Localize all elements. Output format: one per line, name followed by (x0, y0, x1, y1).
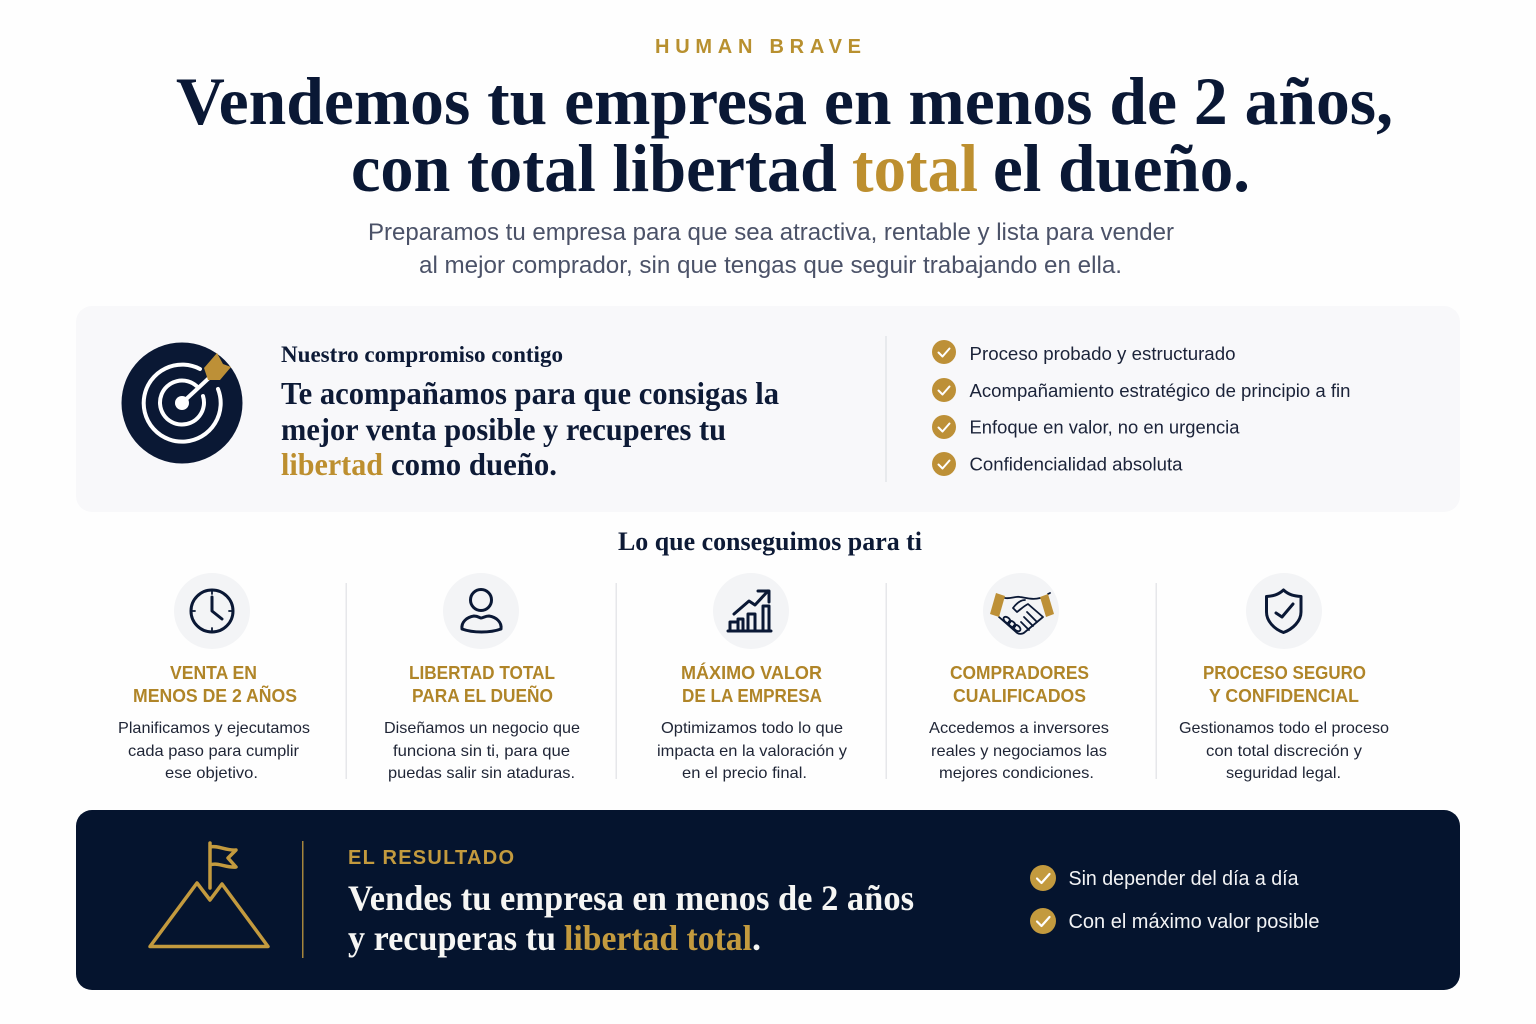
column: libertad total: puedas salir sin ataduras. (388, 765, 575, 782)
title: Vendemos tu empresa en menos de 2 años, (176, 63, 1393, 139)
column: libertad total (384, 573, 580, 782)
column: proceso seguro: PROCESO SEGURO (1203, 663, 1366, 683)
column: máximo valor: MÁXIMO VALOR (681, 662, 822, 683)
column: proceso seguro (1179, 573, 1389, 782)
brand eyebrow: HUMAN BRAVE (655, 36, 861, 58)
result checklist: Con el máximo valor posible (1068, 911, 1320, 933)
title: con total libertad (351, 130, 837, 206)
panel: result (76, 810, 1460, 990)
column: libertad total: LIBERTAD TOTAL (409, 663, 555, 683)
title (176, 63, 1393, 206)
column: venta en menos de 2 años: VENTA EN (170, 663, 257, 683)
column: compradores: Accedemos a inversores (929, 720, 1109, 737)
commitment text (281, 342, 779, 482)
result text: y recuperas tu (348, 918, 556, 958)
title: el dueño. (993, 130, 1250, 206)
column: proceso seguro: seguridad legal. (1226, 765, 1341, 782)
icon: clock (174, 573, 250, 649)
commitment text: Te acompañamos para que consigas la (281, 375, 779, 411)
column: libertad total: funciona sin ti, para que (393, 743, 570, 760)
subtitle (368, 219, 1174, 279)
commitment text: libertad (281, 446, 383, 482)
subtitle: al mejor comprador, sin que tengas que seguir trabajando en ella. (419, 252, 1122, 279)
column: máximo valor: DE LA EMPRESA (682, 686, 822, 706)
column: compradores (929, 573, 1109, 782)
checklist: Acompañamiento estratégico de principio a fin (970, 380, 1350, 401)
commitment text: mejor venta posible y recuperes tu (281, 411, 726, 447)
result checklist: Sin depender del día a día (1068, 868, 1299, 890)
column: venta en menos de 2 años: Planificamos y ejecutamos (118, 720, 310, 737)
icon: mountain with flag (150, 843, 268, 946)
column: libertad total: PARA EL DUEÑO (412, 685, 553, 706)
icon: handshake (983, 573, 1059, 649)
title: total (852, 130, 978, 206)
column: compradores: mejores condiciones. (939, 765, 1094, 782)
column: proceso seguro: Gestionamos todo el proceso (1179, 720, 1389, 737)
panel: commitment (76, 306, 1460, 512)
commitment text: como dueño. (391, 446, 557, 482)
result text: . (752, 918, 761, 958)
column: compradores: reales y negociamos las (931, 743, 1107, 760)
result text: Vendes tu empresa en menos de 2 años (348, 878, 914, 918)
subtitle: Preparamos tu empresa para que sea atractiva, rentable y lista para vender (368, 219, 1174, 246)
column: libertad total: Diseñamos un negocio que (384, 720, 580, 737)
column: proceso seguro: Y CONFIDENCIAL (1209, 686, 1359, 706)
checklist: Proceso probado y estructurado (970, 343, 1236, 364)
icon: growth chart (713, 573, 789, 649)
column: venta en menos de 2 años: cada paso para cumplir (128, 743, 300, 760)
icon: shield (1246, 573, 1322, 649)
column: venta en menos de 2 años: ese objetivo. (165, 765, 258, 782)
column: proceso seguro: con total discreción y (1206, 743, 1362, 760)
icon: target with dart (122, 342, 242, 464)
checklist: Confidencialidad absoluta (970, 454, 1183, 474)
column: venta en menos de 2 años: MENOS DE 2 AÑOS (133, 685, 297, 706)
column: compradores: COMPRADORES (950, 663, 1089, 683)
checklist: Enfoque en valor, no en urgencia (970, 416, 1240, 438)
result checklist (1030, 865, 1320, 934)
result text: libertad total (564, 918, 752, 958)
section heading: Lo que conseguimos para ti (618, 527, 922, 556)
column: máximo valor: impacta en la valoración y (657, 743, 847, 760)
result text: EL RESULTADO (348, 847, 514, 869)
result text (348, 847, 914, 958)
checklist (932, 340, 1350, 476)
column: compradores: CUALIFICADOS (953, 686, 1086, 706)
column: venta en menos de 2 años (118, 573, 310, 782)
column: máximo valor (657, 573, 847, 782)
column: máximo valor: Optimizamos todo lo que (661, 720, 843, 737)
column: máximo valor: en el precio final. (682, 765, 807, 782)
icon: person (443, 573, 519, 649)
commitment text: Nuestro compromiso contigo (281, 342, 563, 367)
